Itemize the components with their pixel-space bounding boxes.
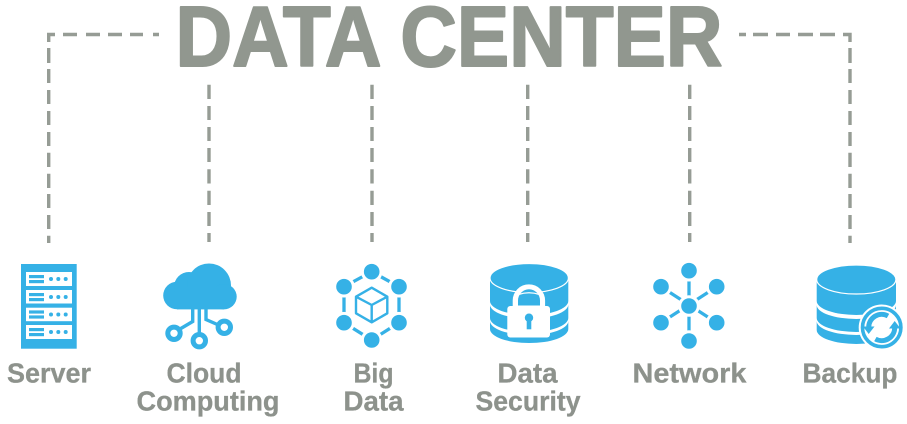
label: big data: Data bbox=[344, 386, 404, 416]
connector: backup bbox=[739, 34, 850, 243]
label: server: Server bbox=[7, 358, 91, 389]
connector: cloud computing bbox=[207, 85, 211, 242]
connector: big data bbox=[370, 85, 374, 242]
icon: cloud computing bbox=[163, 264, 237, 347]
connector: data security bbox=[526, 85, 529, 242]
label: big data: Big bbox=[354, 358, 394, 389]
icon: backup bbox=[817, 265, 905, 350]
label: data security: Security bbox=[476, 386, 581, 416]
label: cloud computing bbox=[136, 358, 280, 416]
label: big data bbox=[344, 358, 404, 416]
label: cloud computing: Cloud bbox=[166, 358, 242, 389]
label: data security: Data bbox=[498, 358, 558, 389]
icon: big data bbox=[335, 262, 408, 349]
connector: network bbox=[688, 85, 691, 242]
label: cloud computing: Computing bbox=[136, 386, 280, 416]
connector: server bbox=[49, 34, 159, 243]
icon: data security bbox=[490, 264, 568, 343]
icon: network bbox=[652, 261, 726, 350]
label: network: Network bbox=[632, 358, 747, 389]
label: data security bbox=[476, 358, 581, 416]
label: backup: Backup bbox=[802, 358, 898, 389]
icon: server bbox=[21, 264, 77, 349]
